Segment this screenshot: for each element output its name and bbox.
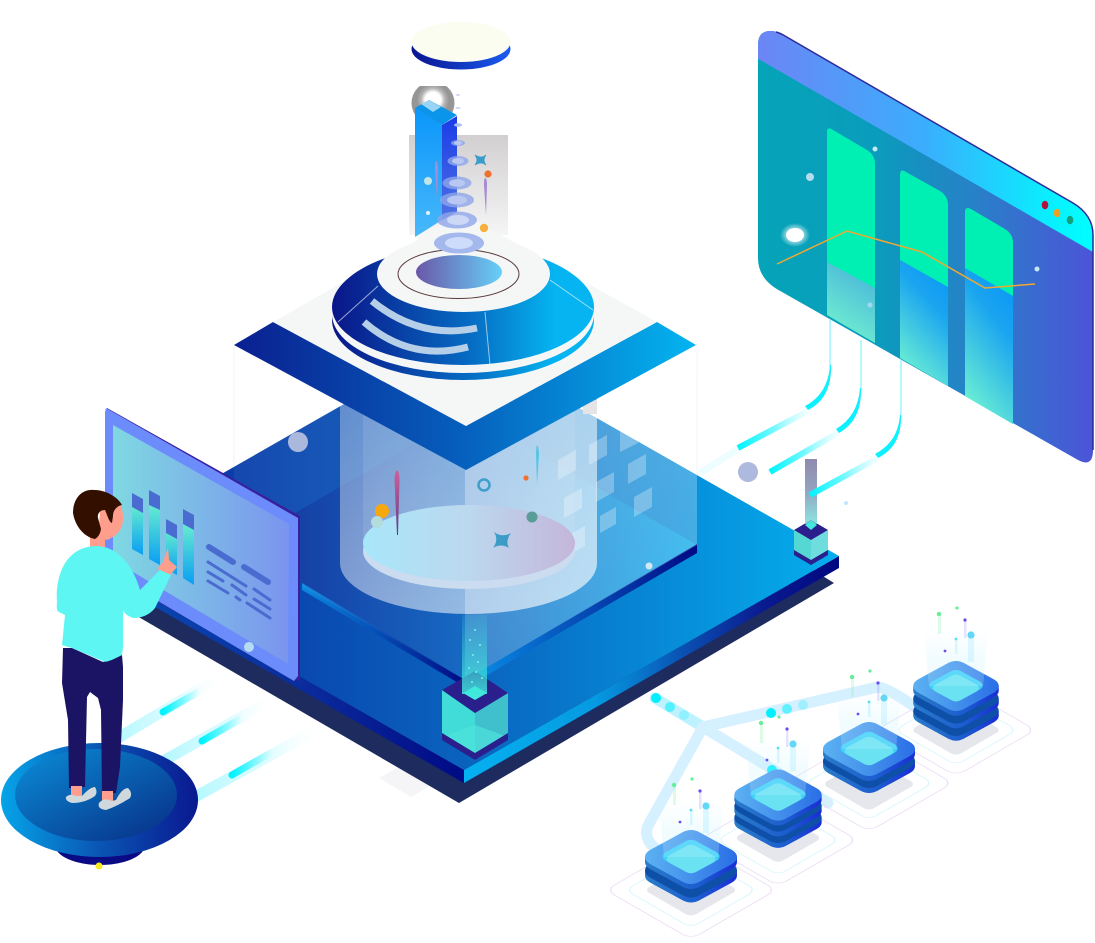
small cube: [794, 459, 828, 565]
dome arcs: [364, 301, 477, 351]
ring outline: [398, 250, 519, 298]
glass wall left: [234, 345, 465, 680]
top floating disc: [412, 22, 510, 70]
monitor beams: [700, 411, 878, 495]
loose dots: [247, 340, 848, 505]
blue upper plate: [234, 322, 696, 470]
monitor data wires: [805, 320, 901, 458]
main platform: [83, 339, 839, 783]
rising rings: [434, 94, 484, 254]
dome base strip: [332, 260, 594, 380]
user disc: [1, 743, 198, 870]
node connector lines: [647, 687, 915, 856]
monitor lights: [780, 146, 1040, 308]
floating glass panes: [558, 422, 652, 556]
window buttons: [1042, 201, 1073, 224]
dome seams: [338, 280, 593, 365]
glass cylinder: [340, 398, 597, 614]
grey ring: [412, 86, 454, 124]
person: [57, 490, 177, 810]
floor shadow patch: [379, 762, 440, 797]
feet: [66, 786, 131, 810]
hand: [158, 547, 177, 578]
platform shadow: [130, 500, 834, 803]
server node 2: [698, 715, 858, 886]
white upper plate: [273, 214, 657, 426]
faint glass edges: [234, 345, 697, 545]
platform right face: [464, 556, 839, 783]
chart bars: [132, 490, 194, 585]
text lines: [208, 547, 270, 618]
floor rings: [876, 684, 1036, 776]
server node 3: [785, 669, 953, 831]
neck: [90, 532, 105, 550]
platform left face: [83, 553, 464, 783]
server node 1: [606, 777, 776, 939]
glass wall right: [465, 345, 697, 680]
inner disc: [363, 505, 575, 589]
pants: [62, 648, 123, 793]
connector pulses: [651, 693, 808, 775]
left screen panel: [105, 408, 300, 682]
face: [98, 500, 123, 540]
dome: [332, 236, 594, 380]
sweater: [57, 546, 171, 662]
white plate cover under column: [415, 214, 510, 262]
main cube: [442, 615, 508, 760]
monitor body: [758, 31, 1093, 462]
dome crest: [377, 236, 550, 312]
line chart: [777, 231, 1035, 288]
server node 4: [876, 606, 1036, 776]
monitor: [755, 10, 1095, 462]
inner floor: [235, 413, 697, 688]
monitor bar 3: [965, 208, 1013, 424]
dome white rim: [332, 255, 594, 373]
monitor bar 2: [900, 171, 948, 386]
monitor title bar: [758, 31, 1092, 252]
panel beams behind user: [118, 676, 322, 797]
dome opening: [416, 255, 502, 289]
platform top: [83, 339, 839, 770]
monitor bar 1: [827, 128, 875, 343]
tube particles: [424, 155, 492, 232]
dome top: [332, 255, 594, 365]
blue column: [415, 100, 457, 237]
hair: [73, 490, 122, 539]
cylinder particles: [371, 445, 652, 570]
grey back card: [409, 135, 508, 235]
